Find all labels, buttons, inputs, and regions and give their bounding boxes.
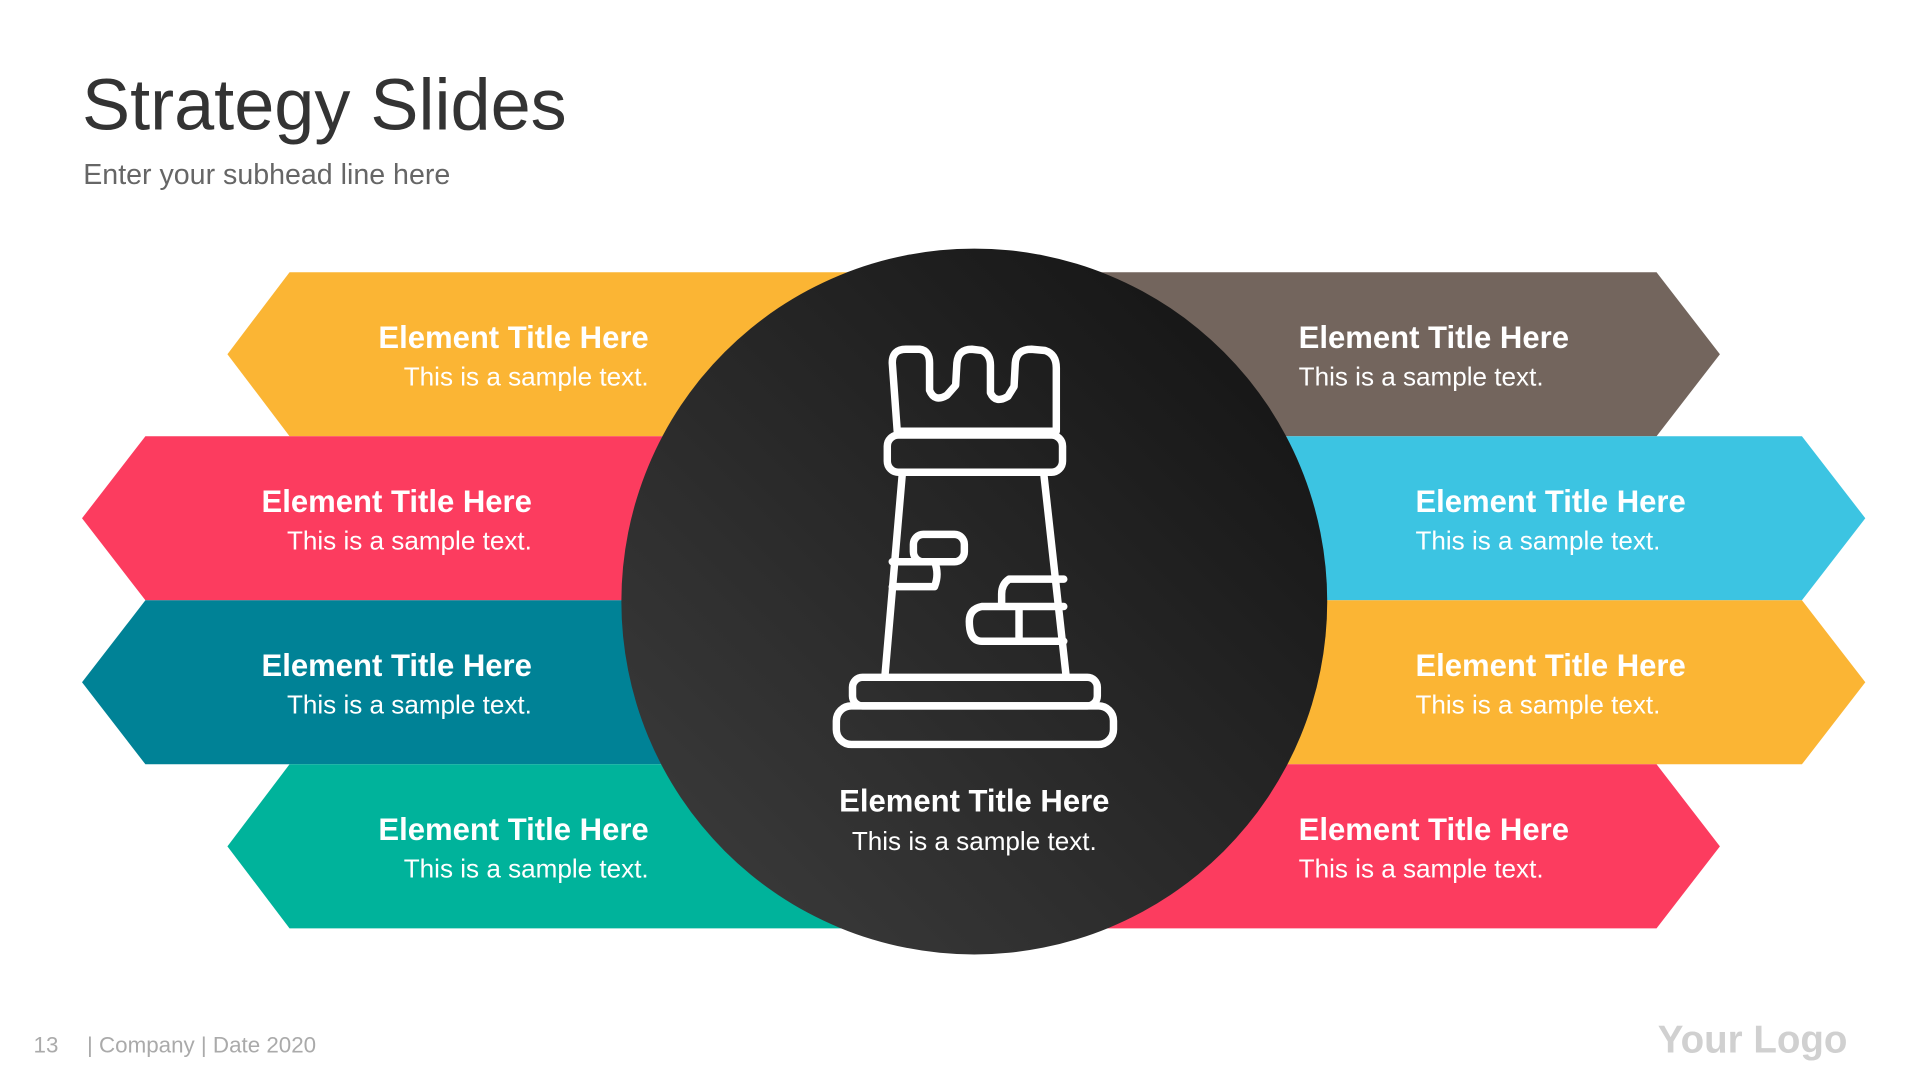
arrow: right red: Element Title Here: [1299, 812, 1569, 847]
arrow: right yellow: Element Title Here: [1415, 648, 1686, 683]
center circle: This is a sample text.: [852, 826, 1097, 856]
arrow: left teal: [82, 600, 982, 764]
center circle: [621, 249, 1327, 954]
arrow: right cyan: [969, 436, 1865, 600]
arrow: right brown: [969, 272, 1720, 436]
arrow: left yellow: Element Title Here: [378, 320, 649, 355]
footer: 13: [34, 1033, 58, 1058]
arrow: left red: This is a sample text.: [287, 525, 532, 555]
arrow: right brown: This is a sample text.: [1299, 361, 1544, 391]
arrow: right red: This is a sample text.: [1299, 853, 1544, 883]
arrow: right brown: Element Title Here: [1299, 320, 1569, 355]
arrow: left yellow: This is a sample text.: [404, 361, 649, 391]
center circle: Element Title Here: [839, 784, 1109, 819]
arrow: left teal: This is a sample text.: [287, 689, 532, 719]
arrow: left yellow: [227, 272, 982, 436]
arrow: left green: [227, 764, 982, 928]
arrow: right red: [969, 764, 1720, 928]
arrow: left red: [82, 436, 982, 600]
arrow: right cyan: Element Title Here: [1415, 484, 1686, 519]
subhead: Enter your subhead line here: [83, 159, 450, 191]
arrow: right cyan: This is a sample text.: [1415, 525, 1660, 555]
arrow: left teal: Element Title Here: [262, 648, 532, 683]
title: Strategy Slides: [82, 65, 567, 145]
arrow: right yellow: This is a sample text.: [1415, 689, 1660, 719]
logo: Your Logo: [1658, 1019, 1847, 1062]
arrow: right yellow: [969, 600, 1865, 764]
arrow: left red: Element Title Here: [262, 484, 532, 519]
arrow: left green: This is a sample text.: [404, 853, 649, 883]
footer: | Company | Date 2020: [87, 1033, 316, 1058]
arrow: left green: Element Title Here: [378, 812, 649, 847]
icon: rook: [836, 349, 1113, 744]
